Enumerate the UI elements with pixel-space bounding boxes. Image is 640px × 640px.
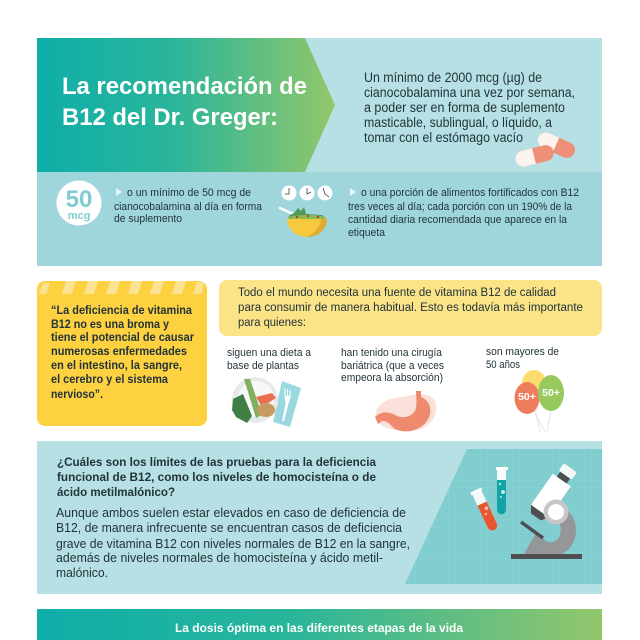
icon: 50 mcg badge	[56, 180, 102, 226]
quote text: nervioso”.	[51, 389, 103, 401]
quote text	[51, 305, 194, 401]
panel: who needs B12 heading	[219, 280, 602, 336]
fortified foods text: etiqueta	[348, 227, 385, 239]
icon: clocks and salad bowl	[280, 186, 332, 237]
answer text	[56, 506, 410, 580]
icon: 50 mcg badge: 50	[66, 186, 92, 213]
question heading: ¿Cuáles son los límites de las pruebas para la deficiencia	[57, 455, 376, 469]
weekly dose text: a poder ser en forma de suplemento	[364, 100, 565, 115]
icon: microscope	[511, 461, 582, 559]
text: bariatric surgery: empeora la absorción)	[341, 372, 443, 384]
answer text: malónico.	[56, 566, 108, 580]
daily supplement text: o un mínimo de 50 mcg de	[127, 187, 251, 199]
question heading	[57, 455, 376, 499]
text: bariatric surgery: bariátrica (que a veces	[341, 360, 444, 372]
panel: Dr. Greger recommendation	[37, 38, 602, 266]
quote text: numerosas enfermedades	[51, 346, 187, 358]
quote text: “La deficiencia de vitamina	[51, 305, 193, 317]
text: bariatric surgery	[341, 347, 444, 384]
title: La recomendación de	[62, 73, 307, 100]
decorative stripes	[39, 281, 204, 294]
title arrow banner	[37, 38, 335, 172]
icon: balloons	[514, 370, 564, 432]
panel: optimal dose banner	[37, 609, 602, 640]
question heading: ácido metilmalónico?	[57, 485, 175, 499]
answer text: B12, de manera infrecuente se encuentran casos de deficiencia	[56, 521, 402, 535]
text: bariatric surgery: han tenido una cirugía	[341, 347, 443, 359]
icon: 50 mcg badge: mcg	[68, 210, 90, 222]
panel: optimal dose banner: La dosis óptima en las diferentes etapas de la vida	[175, 621, 463, 635]
text: over 50: son mayores de	[486, 346, 559, 358]
daily supplement text	[114, 187, 262, 225]
weekly dose text: tomar con el estómago vacío	[364, 130, 523, 145]
fortified foods text: cantidad diaria recomendada que aparece en la	[348, 214, 567, 226]
text: over 50: 50 años	[486, 359, 520, 371]
quote text: tiene el potencial de causar	[51, 332, 194, 344]
text: plant diet: base de plantas	[227, 360, 299, 372]
daily supplement text: de suplemento	[114, 213, 182, 225]
icon: test tube teal	[496, 467, 508, 514]
weekly dose text: cianocobalamina una vez por semana,	[364, 85, 575, 100]
text: plant diet	[227, 347, 312, 372]
answer text: Aunque ambos suelen estar elevados en caso de deficiencia de	[56, 506, 406, 520]
panel: who needs B12 heading: para quienes:	[238, 317, 306, 329]
icon: stomach	[375, 391, 436, 431]
panel: quote card	[37, 281, 207, 426]
icon: test tube red	[470, 488, 500, 532]
daily supplement text: cianocobalamina al día en forma	[114, 201, 262, 213]
answer text: grave de vitamina B12 con niveles normales de B12 en la sangre,	[56, 537, 410, 551]
question heading: funcional de B12, como los niveles de homocisteína o de	[57, 470, 376, 484]
quote text: el cerebro y el sistema	[51, 374, 169, 386]
fortified foods text	[348, 187, 579, 239]
panel: who needs B12 heading: para consumir de manera habitual. Esto es todavía más importante	[238, 302, 583, 314]
panel: test limits	[37, 441, 602, 594]
lab background	[405, 449, 602, 584]
fortified foods text: o una porción de alimentos fortificados con B12	[361, 187, 579, 199]
answer text: además de niveles normales de homocisteína y ácido metil-	[56, 551, 383, 565]
weekly dose text: masticable, sublingual, o líquido, a	[364, 115, 552, 130]
weekly dose text	[364, 70, 575, 145]
text: plant diet: siguen una dieta a	[227, 347, 312, 359]
icon: plate with vegetables and fork	[232, 377, 301, 427]
title: B12 del Dr. Greger:	[62, 104, 278, 131]
fortified foods text: tres veces al día; cada porción con un 190% de la	[348, 201, 572, 213]
icon: balloons: 50+	[518, 391, 536, 403]
quote text: B12 no es una broma y	[51, 319, 170, 331]
quote text: en el intestino, la sangre,	[51, 360, 182, 372]
title	[62, 73, 307, 131]
icon: pills	[514, 130, 578, 168]
icon: balloons: 50+	[542, 387, 560, 399]
weekly dose text: Un mínimo de 2000 mcg (µg) de	[364, 70, 542, 85]
panel: who needs B12 heading: Todo el mundo necesita una fuente de vitamina B12 de calidad	[238, 287, 556, 299]
text: over 50	[486, 346, 559, 371]
